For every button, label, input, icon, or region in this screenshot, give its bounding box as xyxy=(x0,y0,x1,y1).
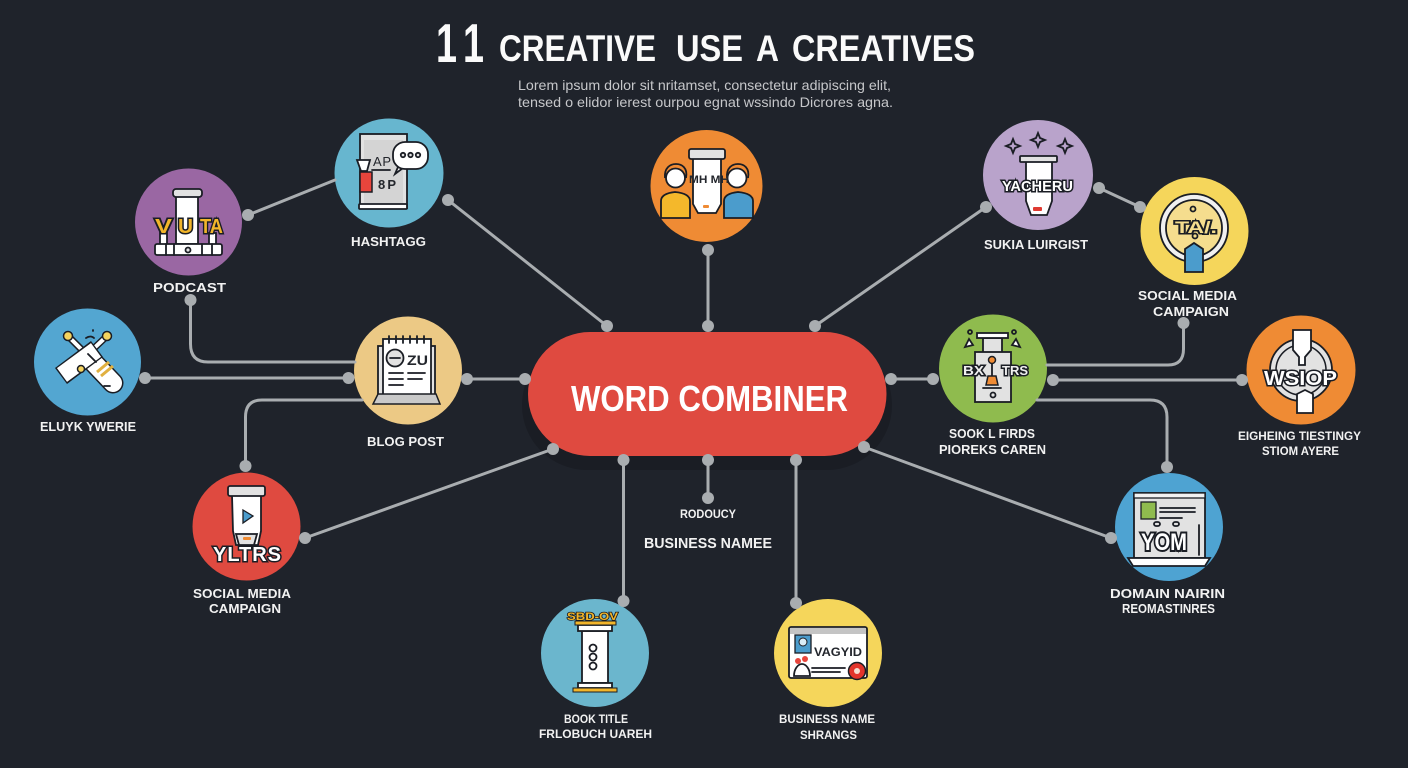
label: sukia luirgist: SUKIA LUIRGIST xyxy=(984,237,1088,252)
title: CREATIVE xyxy=(499,28,656,69)
node: business name card xyxy=(774,599,882,742)
label: social media campaign right xyxy=(1138,288,1238,319)
title: 1 xyxy=(463,12,484,74)
node: hashtag xyxy=(334,118,444,249)
central hub: word combiner: WORD COMBINER xyxy=(571,378,848,419)
label: hashtag: HASHTAGG xyxy=(351,234,426,249)
label: domain name: DOMAIN NAIRIN xyxy=(1110,586,1225,601)
label: rodoucy: RODOUCY xyxy=(680,507,736,521)
subtitle: tensed o elidor ierest ourpou egnat wssindo Dicrores agna. xyxy=(518,94,893,110)
label: book title: BOOK TITLE xyxy=(564,712,628,726)
node: blog post xyxy=(354,316,462,449)
node: orange people xyxy=(650,130,762,242)
icon: laptop xyxy=(1128,493,1210,566)
icon: podcast tower: TA xyxy=(200,216,223,238)
icon: ring with two bottles: WSIOP xyxy=(1264,368,1337,390)
label: business name strangs xyxy=(779,712,875,742)
label: sook l firds xyxy=(939,426,1046,457)
label: blog post: BLOG POST xyxy=(367,434,444,449)
label: sook l firds: SOOK L FIRDS xyxy=(949,426,1035,441)
icon: laptop: YOM xyxy=(1141,529,1187,556)
node: book title xyxy=(539,599,652,741)
label: social media campaign left: SOCIAL MEDIA xyxy=(193,586,292,601)
label: social media campaign left xyxy=(193,586,292,616)
icon: box with lever: TRS xyxy=(1002,363,1028,378)
label: book title xyxy=(539,712,652,741)
node: podcast xyxy=(135,168,242,295)
subtitle xyxy=(518,77,893,110)
icon: document with speech bubble: AP xyxy=(373,154,391,169)
label: eigheing tiestingy: STIOM AYERE xyxy=(1262,444,1339,458)
icon: crossed tools xyxy=(61,330,113,386)
icon: podcast tower xyxy=(155,189,223,255)
icon: document with speech bubble xyxy=(357,134,428,209)
node: social media campaign red xyxy=(192,472,300,616)
icon: badge with bottle: TA/. xyxy=(1175,218,1217,237)
icon: badge with bottle xyxy=(1160,194,1228,272)
label: elyuk ywerie: ELUYK YWERIE xyxy=(40,419,136,434)
title: A xyxy=(756,28,779,69)
icon: ring with two bottles xyxy=(1264,330,1337,413)
icon: pillar: SBD-OV xyxy=(567,611,619,623)
label: eigheing tiestingy xyxy=(1238,429,1361,458)
label: domain name xyxy=(1110,586,1225,616)
title: 1 xyxy=(436,12,457,74)
icon: document with speech bubble: 8P xyxy=(378,177,396,192)
title: USE xyxy=(676,28,743,69)
icon: sparkles and container: YACHERU xyxy=(1002,178,1073,195)
icon: container with play xyxy=(213,486,281,566)
subtitle: Lorem ipsum dolor sit nritamset, consectetur adipiscing elit, xyxy=(518,77,891,93)
node: social purple xyxy=(983,120,1093,252)
icon: container with play: YLTRS xyxy=(213,544,281,566)
icon: podcast tower: U xyxy=(178,216,193,238)
title: CREATIVES xyxy=(792,28,975,69)
icon: two people and container: MH MH xyxy=(689,174,729,186)
label: podcast: PODCAST xyxy=(153,280,226,295)
icon: id card xyxy=(789,627,867,680)
label: book title: FRLOBUCH UAREH xyxy=(539,727,652,741)
label: business name strangs: BUSINESS NAME xyxy=(779,712,875,726)
node: domain name xyxy=(1110,473,1225,616)
icon: box with lever xyxy=(963,330,1028,402)
label: business namee: BUSINESS NAMEE xyxy=(644,535,772,552)
label: social media campaign right: SOCIAL MEDIA xyxy=(1138,288,1238,303)
label: eigheing tiestingy: EIGHEING TIESTINGY xyxy=(1238,429,1361,443)
node: social media campaign yellow xyxy=(1138,177,1248,319)
label: domain name: REOMASTINRES xyxy=(1122,601,1215,616)
node: elyuk ywerie xyxy=(34,308,141,434)
node: green xyxy=(939,314,1047,457)
connectors xyxy=(139,180,1248,609)
central hub: word combiner xyxy=(522,332,892,470)
label: sook l firds: PIOREKS CAREN xyxy=(939,442,1046,457)
node: wsiop orange xyxy=(1238,316,1361,458)
icon: blog page on laptop: ZU xyxy=(407,352,428,368)
icon: id card: VAGYID xyxy=(814,645,862,659)
icon: pillar xyxy=(567,611,619,692)
icon: box with lever: BX xyxy=(963,363,984,378)
icon: podcast tower: V xyxy=(155,216,173,238)
label: social media campaign left: CAMPAIGN xyxy=(209,601,281,616)
title xyxy=(436,12,975,74)
label: business name strangs: SHRANGS xyxy=(800,728,857,742)
label: social media campaign right: CAMPAIGN xyxy=(1153,304,1229,319)
